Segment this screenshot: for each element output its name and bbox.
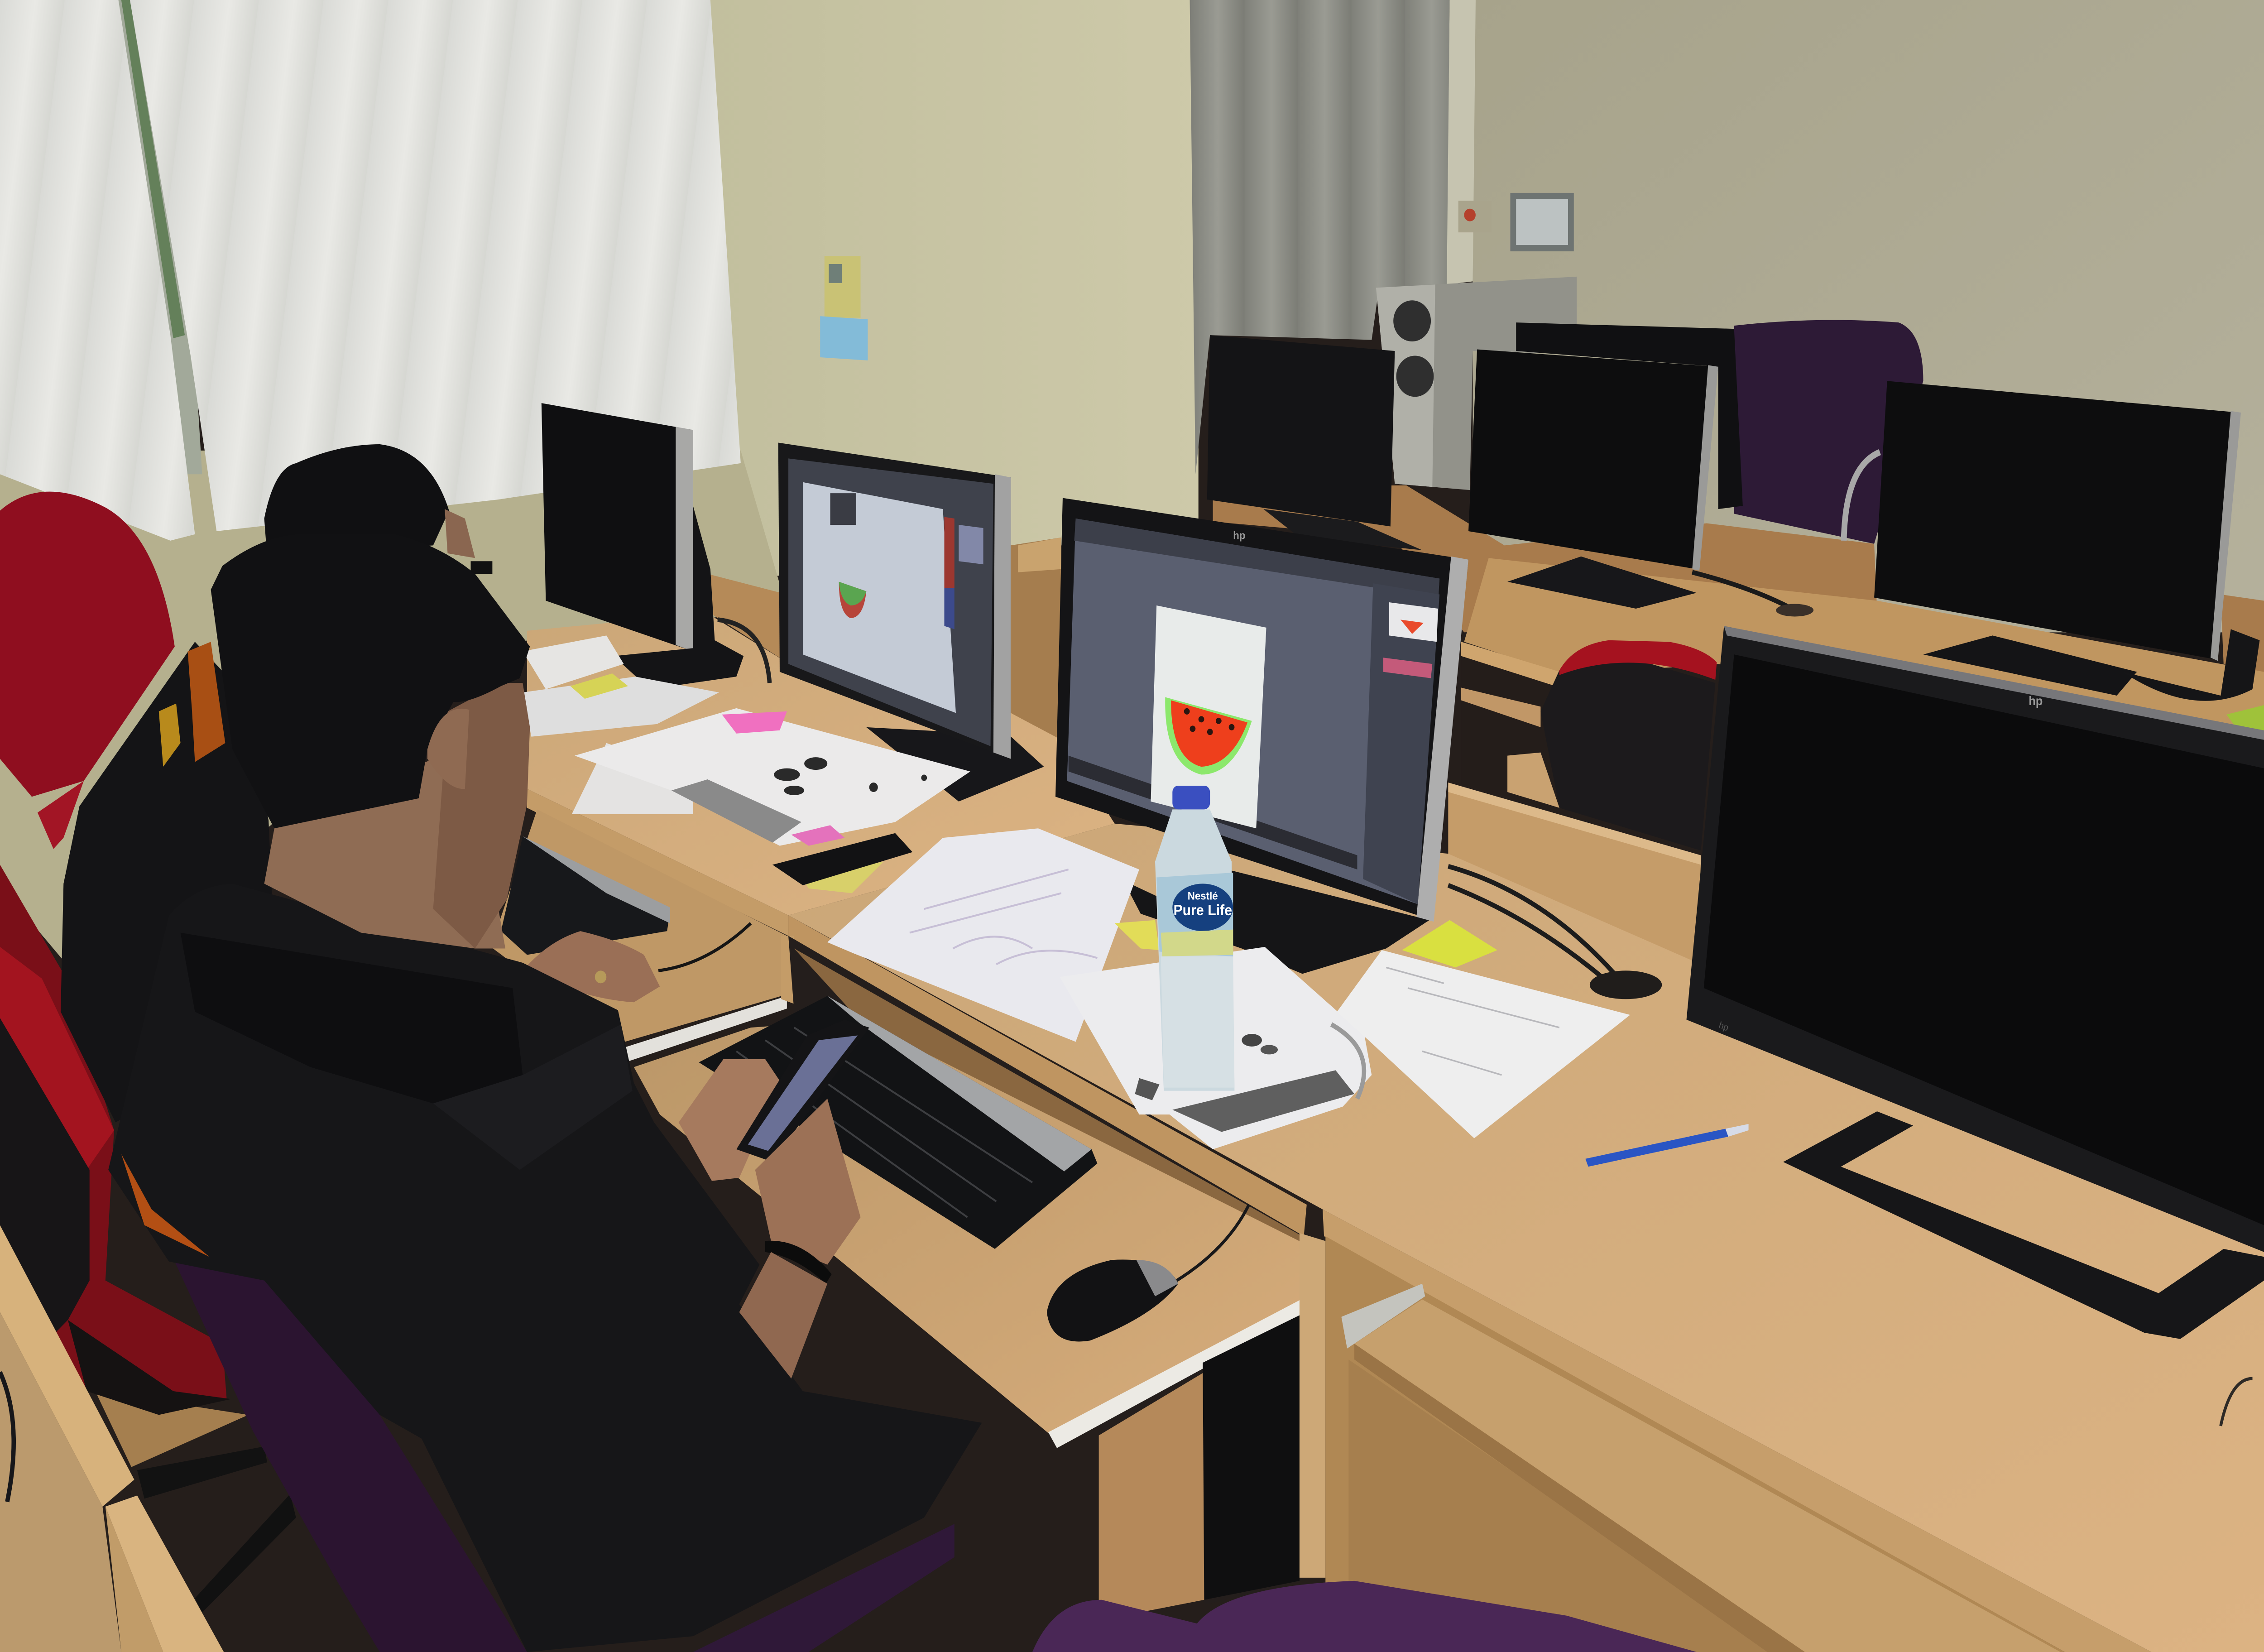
monitor: far back bbox=[1516, 322, 1743, 509]
papers on main desk bbox=[827, 828, 1630, 1149]
cabinet shadow below main desk bbox=[788, 936, 1304, 1604]
mouse cable back desk bbox=[658, 923, 751, 970]
wall thermostat and notice bbox=[820, 256, 868, 360]
window and left curtains bbox=[0, 0, 741, 541]
cable grommet and cables bbox=[1448, 866, 1662, 999]
water bottle: Nestlé bbox=[1188, 889, 1218, 902]
monitor: centre left with illustrator bbox=[778, 442, 1044, 802]
purple chair at back bbox=[1734, 320, 1923, 544]
red chair lower left bbox=[0, 865, 231, 1415]
sticky note far right bbox=[2226, 705, 2264, 730]
chair base legs bbox=[137, 1446, 296, 1613]
back desk partitions bbox=[1011, 485, 2264, 743]
red chair top left bbox=[0, 492, 175, 849]
door frame bbox=[1447, 0, 1476, 284]
monitor: back centre bbox=[1468, 349, 1813, 616]
mouse and cable bbox=[1047, 1205, 1249, 1341]
desk leg and pc tower bbox=[1099, 1233, 1325, 1620]
partition behind left monitor bbox=[707, 574, 787, 663]
grey curtain at back bbox=[1190, 0, 1450, 474]
monitor: left far bbox=[542, 403, 770, 689]
hands holding phone bbox=[679, 1020, 869, 1378]
person: front student bbox=[108, 534, 982, 1652]
desk: main surface bbox=[788, 824, 2264, 1652]
back desk surface bbox=[1461, 558, 2264, 808]
front keyboard bbox=[699, 996, 1097, 1249]
monitor: large foreground right: hp bbox=[1717, 1020, 1730, 1033]
inner brown band behind keyboard tray bbox=[794, 949, 1302, 1249]
keyboard tray under left desk bbox=[491, 809, 794, 1062]
purple chair under front student bbox=[175, 1262, 955, 1652]
desk: far left surface bbox=[527, 613, 1115, 915]
red chair back in row bbox=[1540, 640, 1717, 850]
under-desk panel and keyboard tray right bbox=[1325, 1236, 2065, 1652]
back student hand with ring bbox=[523, 931, 660, 1002]
wire scrap on desk bbox=[2221, 1378, 2252, 1426]
wall alarm and framed sign bbox=[1458, 193, 1574, 251]
monitor: large foreground right: hp bbox=[2029, 694, 2043, 708]
monitor: back right bbox=[1874, 381, 2259, 701]
water bottle bbox=[1155, 786, 1234, 1091]
desk front edges bbox=[527, 789, 2151, 1652]
monitor: centre with watermelon: hp bbox=[1233, 529, 1245, 542]
water bottle: Pure Life bbox=[1173, 902, 1232, 919]
floor and wooden area under chair bbox=[95, 1391, 248, 1467]
purple chair foreground bottom bbox=[1032, 1581, 1697, 1652]
keyboard tray front bbox=[634, 1020, 1302, 1448]
desk partition front bbox=[1448, 783, 1701, 967]
monitor: large foreground right bbox=[1686, 626, 2264, 1339]
person: back student bbox=[61, 444, 492, 1123]
phone on desk bbox=[772, 833, 912, 893]
computer tower at back bbox=[1376, 277, 1577, 490]
desk corner bottom-left bbox=[0, 1225, 224, 1652]
monitor: centre with watermelon bbox=[1055, 498, 1468, 974]
back keyboard bbox=[501, 836, 670, 955]
pen bbox=[1585, 1124, 1749, 1167]
papers on left desk bbox=[523, 635, 970, 846]
monitor: back left bbox=[1207, 335, 1422, 550]
